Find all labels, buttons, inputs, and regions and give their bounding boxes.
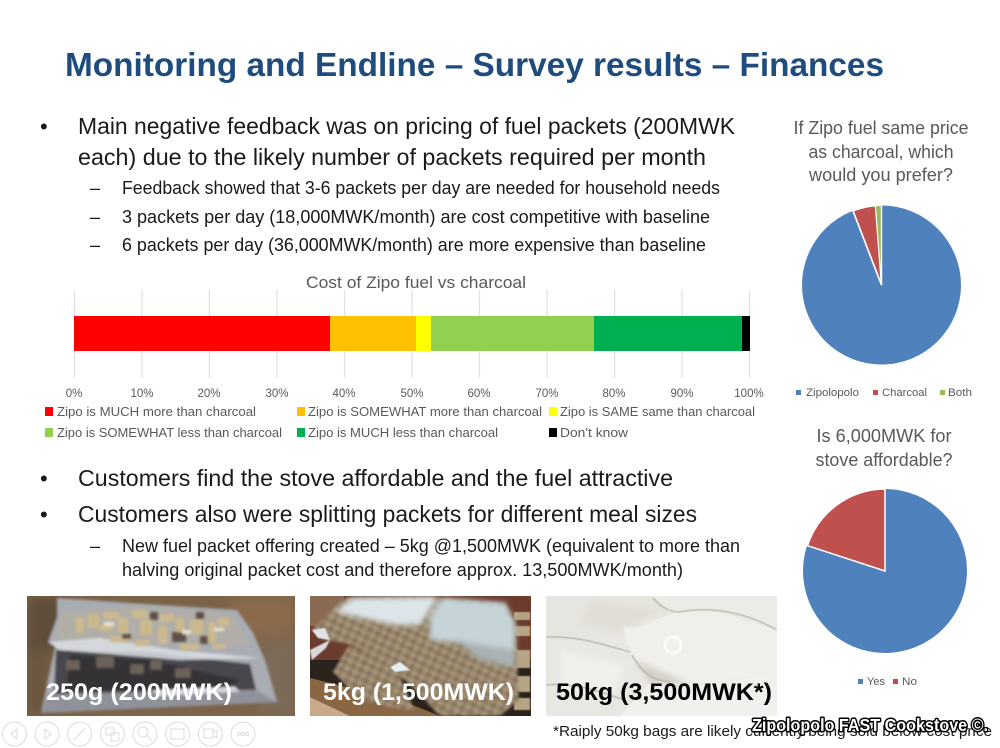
slideshow controls	[2, 722, 255, 746]
photo caption: 50kg: 50kg (3,500MWK*)	[556, 679, 772, 706]
bar chart: cost of Zipo fuel vs charcoal: Zipo is SOMEWHAT less than charcoal	[57, 425, 282, 440]
pie chart: preference at same price: would you prefer?	[808, 165, 953, 185]
text block: affordability and packet splitting: •	[40, 502, 48, 527]
text block: pricing feedback: –	[90, 235, 100, 255]
text block: affordability and packet splitting: Customers find the stove affordable and the fuel attractive	[78, 465, 673, 491]
bar chart: cost of Zipo fuel vs charcoal: Zipo is MUCH more than charcoal	[57, 404, 256, 419]
text block: pricing feedback: each) due to the likely number of packets required per month	[78, 144, 706, 170]
pie chart: preference at same price: If Zipo fuel same price	[794, 118, 968, 138]
bar chart: cost of Zipo fuel vs charcoal: Zipo is SOMEWHAT more than charcoal	[308, 404, 542, 419]
pie chart: preference at same price	[794, 118, 972, 399]
photo caption: 250g: 250g (200MWK)	[46, 679, 232, 706]
text block: affordability and packet splitting: halving original packet cost and therefore approx. 13,500MWK/month)	[122, 560, 683, 580]
bar chart: cost of Zipo fuel vs charcoal: 60%	[467, 388, 491, 400]
bar chart: cost of Zipo fuel vs charcoal: 100%	[734, 388, 764, 400]
pie chart: stove affordability: Is 6,000MWK for	[816, 426, 952, 446]
text block: affordability and packet splitting: Customers also were splitting packets for different meal sizes	[78, 501, 697, 527]
text block: affordability and packet splitting	[40, 465, 740, 580]
bar chart: cost of Zipo fuel vs charcoal: 90%	[670, 388, 694, 400]
bar chart: cost of Zipo fuel vs charcoal: 50%	[400, 388, 424, 400]
bar chart: cost of Zipo fuel vs charcoal: 30%	[265, 388, 289, 400]
bar chart: cost of Zipo fuel vs charcoal: Don't know	[560, 425, 629, 440]
bar chart: cost of Zipo fuel vs charcoal: 40%	[332, 388, 356, 400]
text block: pricing feedback: Feedback showed that 3-6 packets per day are needed for household needs	[122, 178, 720, 198]
pie chart: preference at same price: as charcoal, which	[808, 142, 954, 162]
pie chart: stove affordability: stove affordable?	[816, 450, 952, 470]
text block: pricing feedback: Main negative feedback was on pricing of fuel packets (200MWK	[78, 113, 736, 139]
text block: pricing feedback: 3 packets per day (18,000MWK/month) are cost competitive with baseline	[122, 207, 710, 227]
photo: 250g fuel packet	[27, 596, 295, 716]
photo: 5kg fuel bags	[310, 596, 531, 716]
text block: affordability and packet splitting: New fuel packet offering created – 5kg @1,500MWK (equivalent to more than	[122, 536, 740, 556]
text block: affordability and packet splitting: –	[90, 536, 100, 556]
bar chart: cost of Zipo fuel vs charcoal: Cost of Zipo fuel vs charcoal	[306, 274, 526, 292]
bar chart: cost of Zipo fuel vs charcoal	[45, 274, 764, 440]
photo caption: 5kg: 5kg (1,500MWK)	[323, 679, 514, 706]
bar chart: cost of Zipo fuel vs charcoal: 10%	[130, 388, 154, 400]
bar chart: cost of Zipo fuel vs charcoal: 0%	[66, 388, 82, 400]
bar chart: cost of Zipo fuel vs charcoal: 20%	[197, 388, 221, 400]
bar chart: cost of Zipo fuel vs charcoal: Zipo is SAME same than charcoal	[560, 404, 755, 419]
text block: pricing feedback: –	[90, 178, 100, 198]
text block: pricing feedback	[40, 113, 736, 255]
pie chart: preference at same price: Both	[948, 387, 972, 399]
text block: pricing feedback: –	[90, 207, 100, 227]
text block: affordability and packet splitting: •	[40, 466, 48, 491]
pie chart: preference at same price: Zipolopolo	[806, 387, 859, 399]
bar chart: cost of Zipo fuel vs charcoal: Zipo is MUCH less than charcoal	[308, 425, 498, 440]
pie chart: preference at same price: Charcoal	[882, 387, 927, 399]
bar chart: cost of Zipo fuel vs charcoal: 80%	[602, 388, 626, 400]
text block: pricing feedback: •	[40, 114, 48, 139]
title: Monitoring and Endline – Survey results – Finances	[65, 46, 884, 83]
photo: 50kg white sacks	[546, 596, 777, 716]
text block: pricing feedback: 6 packets per day (36,000MWK/month) are more expensive than baseline	[122, 235, 706, 255]
pie chart: stove affordability: No	[902, 676, 917, 688]
footnote: *Raiply 50kg bags are likely currently being sold below cost price	[553, 723, 992, 740]
pie chart: stove affordability	[803, 426, 967, 688]
bar chart: cost of Zipo fuel vs charcoal: 70%	[535, 388, 559, 400]
pie chart: stove affordability: Yes	[867, 676, 885, 688]
